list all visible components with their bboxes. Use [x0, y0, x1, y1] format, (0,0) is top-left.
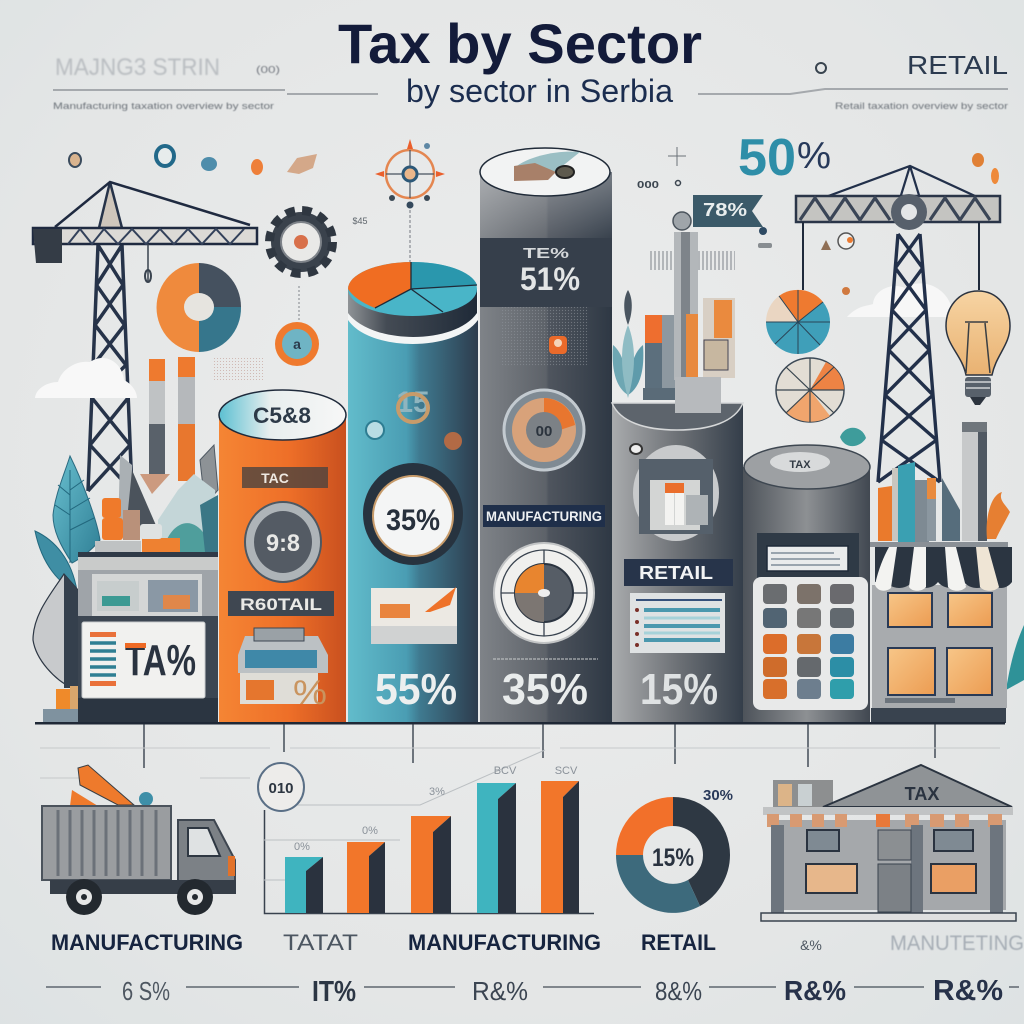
gear icon — [271, 212, 331, 272]
bar labels: 3% — [429, 786, 445, 798]
column: calculator — [743, 445, 870, 723]
bar labels: 0% — [362, 825, 378, 837]
skyline behind shop — [878, 486, 892, 541]
awning — [875, 547, 1012, 591]
crane tower lattice — [878, 234, 940, 482]
crane jib — [796, 196, 1000, 222]
leaf: gray — [33, 574, 78, 688]
crane counterweight — [33, 229, 62, 263]
calculator body — [753, 533, 868, 710]
rear building — [773, 780, 833, 810]
drum with pie top — [348, 262, 478, 344]
header block: left: (00) — [256, 65, 280, 76]
callout: 50%: % — [797, 135, 831, 177]
mountains — [158, 445, 218, 552]
band: retail — [228, 591, 334, 616]
icon: compass target — [375, 139, 445, 262]
flag: 78%: 78% — [703, 200, 747, 220]
chimney — [962, 430, 987, 541]
percentage row: R&% — [472, 976, 528, 1006]
bar chart — [258, 750, 594, 914]
sector labels row: MANUFACTURING — [51, 930, 243, 955]
pie chart: tan wheel — [776, 358, 844, 422]
baseline — [35, 722, 1005, 724]
orange circle badge — [275, 286, 319, 366]
halftone panel — [500, 307, 589, 366]
awning — [767, 814, 1002, 827]
pots — [56, 689, 70, 709]
hanger lines — [803, 222, 979, 290]
column top ellipse — [219, 390, 346, 440]
chassis — [50, 880, 236, 894]
barcode — [650, 251, 735, 270]
door — [878, 864, 911, 912]
flag: 78% — [693, 195, 763, 227]
industrial blocks — [118, 455, 132, 535]
crane top — [99, 182, 122, 228]
icon: small marks near third column: 000 — [637, 180, 660, 191]
pie chart: orange and teal — [766, 290, 830, 354]
building body — [78, 552, 218, 723]
dial — [504, 390, 584, 470]
donut chart — [616, 787, 733, 913]
icon: lightbulb — [946, 291, 1010, 405]
header block: left: Manufacturing taxation overview by sector — [53, 101, 274, 112]
base — [675, 377, 721, 413]
leaf — [1006, 625, 1024, 690]
calculator keys — [763, 584, 854, 699]
truck — [42, 765, 236, 915]
bank building: TAX — [905, 784, 939, 804]
sector labels row — [51, 930, 1024, 955]
pie chart: left donut — [157, 263, 241, 352]
cloud: right — [847, 283, 953, 317]
percentage row: 6 S% — [122, 976, 170, 1006]
column: orange — [219, 390, 346, 723]
top disc — [480, 148, 610, 196]
value: 55% — [375, 665, 457, 714]
roof — [823, 765, 1012, 807]
band: top stat — [480, 238, 612, 307]
percentage row — [46, 975, 1019, 1008]
sign TA% — [82, 622, 205, 698]
machine icon — [238, 628, 328, 712]
bank building — [761, 765, 1016, 921]
icon: small marks near third column — [637, 147, 686, 191]
percentage row: R&% — [784, 975, 846, 1006]
top ellipse — [744, 445, 870, 489]
small icons in column — [366, 386, 462, 450]
small floating icons: top left — [69, 146, 999, 381]
value: 35% — [502, 665, 588, 714]
dial — [245, 502, 321, 582]
load — [78, 765, 134, 805]
windows — [807, 830, 839, 851]
column: teal — [348, 262, 478, 723]
cap label: C5&8 — [253, 403, 311, 428]
percentage row: R&% — [933, 975, 1003, 1007]
columns — [771, 825, 784, 913]
bars — [285, 781, 579, 913]
band: TAC — [242, 467, 328, 488]
header block: right: RETAIL — [907, 50, 1008, 80]
band: RETAIL — [624, 559, 733, 586]
retail skyline on column — [613, 212, 735, 413]
right crane — [796, 166, 1000, 482]
cab — [178, 820, 235, 888]
band: top stat: TE% — [523, 245, 569, 262]
ring: percent: 35% — [386, 504, 440, 537]
bar labels: SCV — [555, 765, 578, 777]
shop body — [872, 585, 1007, 708]
connector ticks — [40, 724, 1000, 778]
ring: percent — [363, 463, 463, 565]
sign TA%: TA% — [125, 636, 196, 685]
card — [371, 587, 457, 644]
band: manufacturing: MANUFACTURING — [486, 508, 602, 524]
chart axes — [264, 810, 594, 914]
sector labels row: TATAT — [283, 930, 358, 955]
chimneys — [140, 357, 195, 494]
small floating icons: middle right — [758, 227, 866, 446]
percentage row: 8&% — [655, 976, 702, 1006]
shop base — [871, 708, 1006, 723]
band: RETAIL: RETAIL — [639, 563, 713, 583]
column: dark gray — [480, 148, 612, 723]
header block: left: MAJNG3 STRIN — [55, 54, 220, 81]
crane jib — [33, 228, 257, 244]
band: manufacturing — [483, 505, 605, 527]
sector labels row: RETAIL — [641, 930, 716, 955]
leaf: teal large — [53, 456, 100, 563]
donut chart: 30% — [703, 787, 733, 804]
base — [761, 913, 1016, 921]
callout: 50%: 50 — [738, 129, 796, 187]
header block: right: Retail taxation overview by sector — [835, 101, 1008, 112]
sector labels row: MANUFACTURING — [408, 930, 601, 955]
band: top stat: 51% — [520, 261, 580, 297]
percentage row: IT% — [312, 976, 356, 1008]
subtitle: by sector in Serbia — [406, 73, 673, 109]
header block: left — [53, 54, 378, 112]
dish top — [612, 403, 743, 430]
top ellipse: TAX — [789, 459, 811, 471]
bar labels — [294, 765, 578, 853]
dial badge: 010 — [268, 780, 294, 797]
windows — [888, 593, 932, 627]
title: Tax by Sector — [338, 12, 702, 75]
small floating icons: top left: $45 — [352, 216, 368, 226]
small icons in column: 15 — [396, 386, 430, 419]
body — [771, 820, 1006, 910]
header block: right — [698, 50, 1008, 112]
cargo box — [42, 806, 171, 880]
list card — [630, 593, 725, 653]
dial badge — [258, 763, 304, 811]
crane hub — [891, 194, 927, 230]
orange circle badge: a — [293, 336, 301, 352]
shop scene — [870, 422, 1024, 723]
wheels — [66, 879, 102, 915]
cloud: left — [35, 358, 137, 398]
crane tower lattice — [88, 245, 132, 491]
bar labels: BCV — [494, 765, 517, 777]
callout: 50% — [738, 129, 831, 187]
foliage — [987, 492, 1010, 539]
bar labels: 0% — [294, 841, 310, 853]
tower — [674, 232, 698, 380]
target chart — [494, 543, 594, 643]
left factory scene — [33, 445, 218, 723]
dial: 9:8 — [266, 530, 300, 557]
donut chart: 15% — [652, 844, 694, 872]
shelf icon — [630, 444, 719, 541]
machine icon: % — [293, 674, 327, 712]
band: TAC: TAC — [261, 470, 289, 486]
column: retail — [612, 403, 743, 723]
crane hook — [147, 244, 149, 282]
value: 15% — [640, 665, 718, 714]
sector labels row: &% — [800, 937, 822, 953]
band: retail: R60TAIL — [240, 595, 322, 614]
dial: 00 — [536, 423, 552, 440]
leaf: teal small — [35, 531, 77, 591]
buildings — [645, 315, 662, 388]
plant — [613, 290, 643, 398]
left crane — [33, 182, 257, 491]
crane cables — [812, 166, 988, 205]
